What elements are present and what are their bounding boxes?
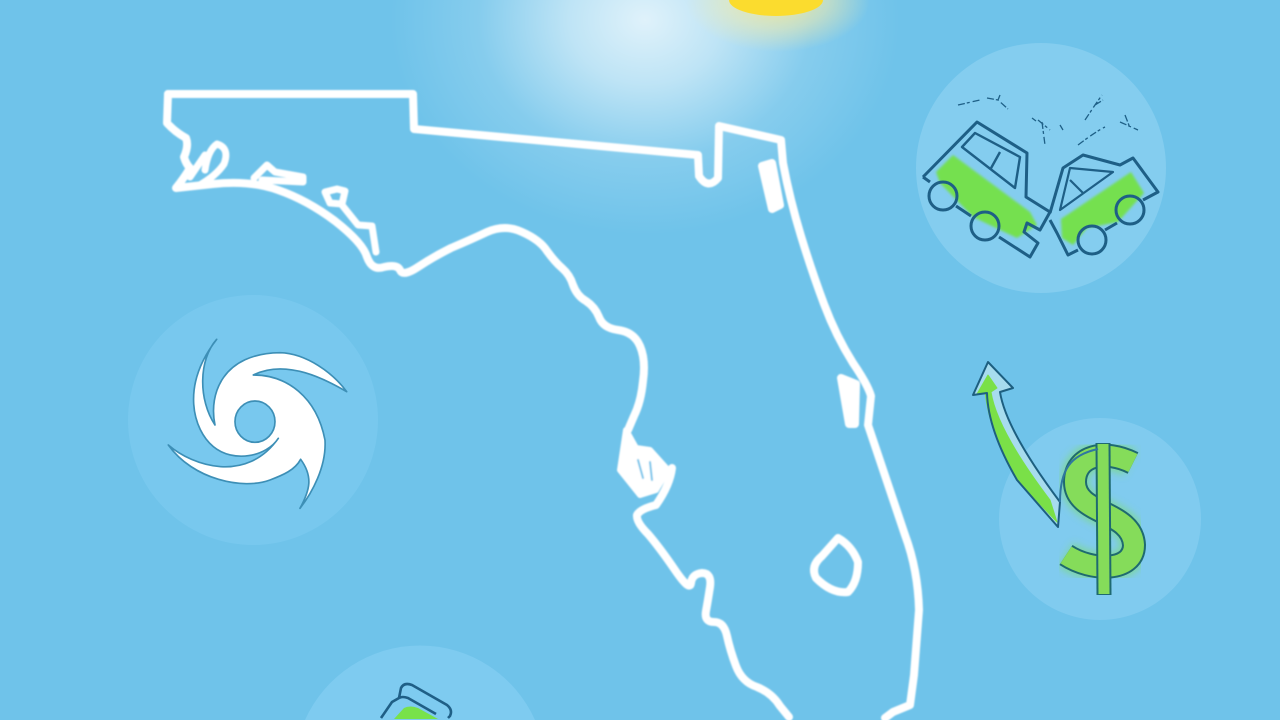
Florida outline (167, 94, 919, 718)
state border (167, 94, 919, 718)
left car (923, 122, 1050, 257)
growth arrow (973, 362, 1098, 527)
icon backdrop circles (128, 43, 1201, 720)
right car (1050, 155, 1158, 255)
icon: car crash (923, 95, 1158, 257)
Tampa Bay inner marks (638, 460, 652, 480)
icon: hurricane (168, 339, 347, 508)
icon: jar (381, 684, 451, 719)
sun glow (390, 0, 900, 235)
dollar sign (1066, 443, 1134, 595)
icon: rising cost (973, 362, 1134, 595)
debris (958, 95, 1138, 145)
sun (686, 0, 870, 52)
